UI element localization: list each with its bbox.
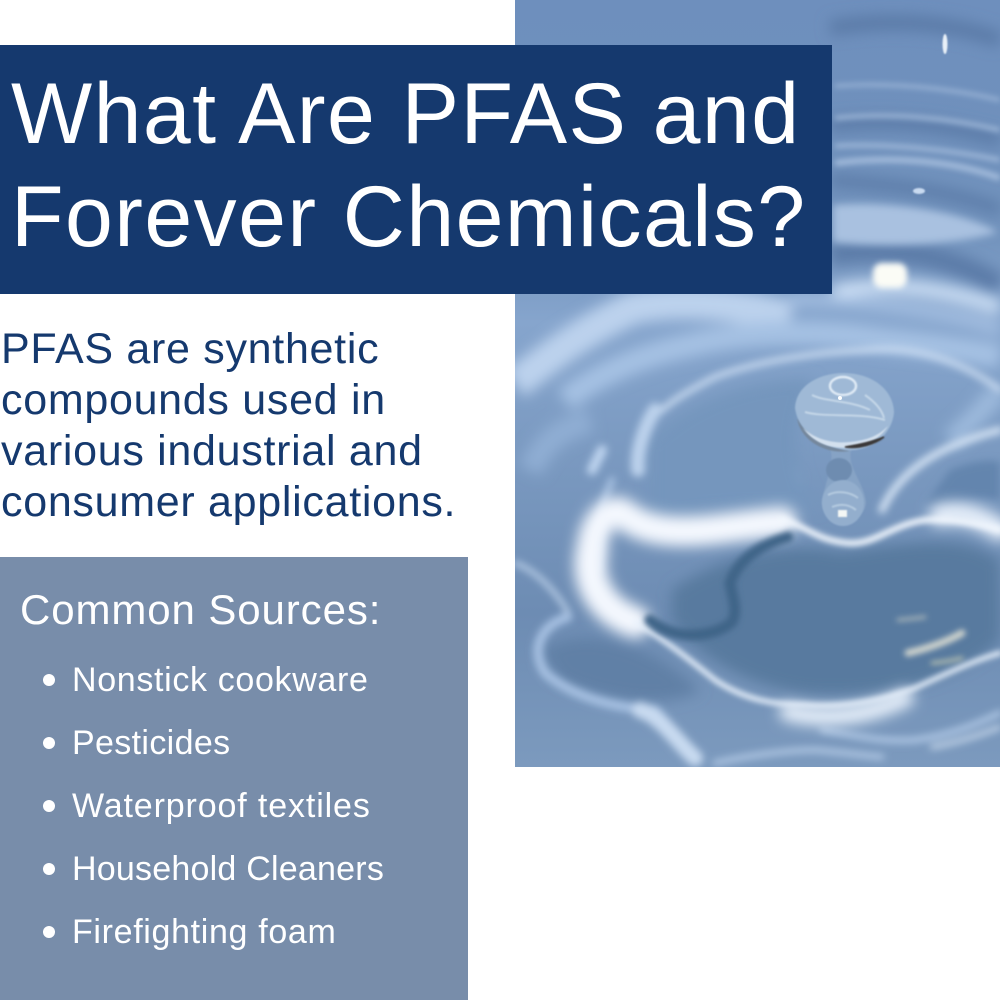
glints at top xyxy=(913,34,948,194)
yellow glints xyxy=(898,617,962,663)
intro paragraph: consumer applications. xyxy=(1,478,456,526)
title text xyxy=(11,66,807,265)
dark curved shadow xyxy=(650,537,788,635)
list item: waterproof textiles: Waterproof textiles xyxy=(72,787,371,825)
source list xyxy=(43,661,384,951)
title text: What Are PFAS and xyxy=(11,66,800,162)
list item: pesticides: Pesticides xyxy=(72,724,230,762)
bright ripple ridges xyxy=(515,349,1000,763)
list item: nonstick cookware: Nonstick cookware xyxy=(72,661,369,699)
intro paragraph xyxy=(1,325,456,526)
panel heading: Common Sources: xyxy=(20,586,381,633)
photo: water droplet and ripples xyxy=(515,0,1000,767)
droplet head xyxy=(795,373,894,450)
panel: common sources xyxy=(0,557,468,1000)
dark pool xyxy=(672,542,1000,695)
intro paragraph: PFAS are synthetic xyxy=(1,325,379,373)
intro paragraph: various industrial and xyxy=(1,427,423,475)
intro paragraph: compounds used in xyxy=(1,376,386,424)
title banner xyxy=(0,45,832,294)
droplet neck xyxy=(822,448,866,520)
bright highlight spot xyxy=(873,263,907,288)
title text: Forever Chemicals? xyxy=(11,169,807,265)
droplet xyxy=(795,373,894,526)
list item: firefighting foam: Firefighting foam xyxy=(72,913,336,951)
list item: household cleaners: Household Cleaners xyxy=(72,850,384,888)
